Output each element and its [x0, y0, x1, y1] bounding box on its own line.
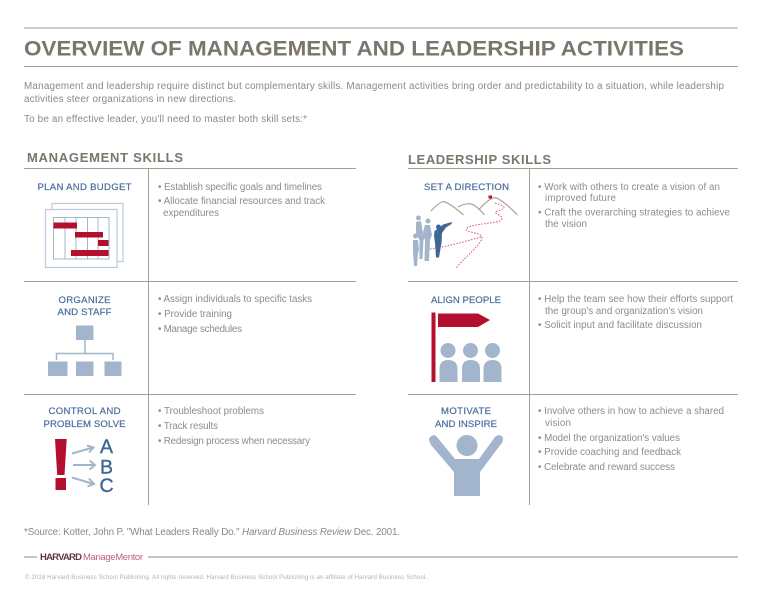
icon: exclamation mark with options [55, 436, 114, 497]
panel: control and problem solve [44, 406, 310, 497]
label: motivate and inspire: AND INSPIRE [435, 419, 497, 430]
bullets: control and problem solve: • Troubleshoot problems [158, 406, 264, 417]
bullets: set a direction: • Work with others to create a vision of an [538, 182, 720, 193]
label: organize and staff: ORGANIZE [58, 295, 110, 306]
icon: exclamation mark with options: C [99, 475, 114, 497]
logo: Harvard ManageMentor [40, 552, 143, 563]
label: plan and budget: PLAN AND BUDGET [38, 182, 132, 193]
bullets: plan and budget: expenditures [163, 208, 219, 219]
panel: plan and budget [38, 182, 325, 268]
label: motivate and inspire: MOTIVATE [441, 406, 491, 417]
panel: align people [431, 294, 733, 382]
bullets: align people: the group's and organization's vision [545, 306, 703, 317]
label: organize and staff [58, 295, 112, 318]
bullets: organize and staff: • Provide training [158, 309, 232, 320]
bullets: set a direction: improved future [545, 193, 617, 204]
bullets: plan and budget: • Allocate financial resources and track [158, 196, 325, 207]
label: control and problem solve: PROBLEM SOLVE [44, 419, 126, 430]
bullets: set a direction: • Craft the overarching strategies to achieve [538, 208, 731, 218]
bullets: organize and staff: • Assign individuals to specific tasks [158, 294, 312, 305]
label: organize and staff: AND STAFF [58, 307, 112, 318]
panel: set a direction [413, 182, 731, 268]
panel: motivate and inspire [429, 406, 724, 496]
intro text: activities steer organizations in new directions. [24, 94, 236, 105]
bullets: motivate and inspire [538, 406, 724, 473]
heading: management skills: MANAGEMENT SKILLS [27, 150, 183, 165]
logo: Harvard ManageMentor: ManageMentor [83, 552, 143, 563]
logo: Harvard ManageMentor: HARVARD [40, 552, 82, 563]
icon: leader pointing at mountains [413, 196, 518, 268]
bullets: set a direction: the vision [545, 219, 587, 230]
icon: gantt chart [46, 204, 123, 268]
bullets: motivate and inspire: • Provide coaching and feedback [538, 447, 681, 458]
bullets: motivate and inspire: • Involve others in how to achieve a shared [538, 406, 724, 417]
bullets: organize and staff: • Manage schedules [158, 324, 242, 335]
bullets: organize and staff [158, 294, 312, 335]
source note: *Source: Kotter, John P. "What Leaders Really Do." Harvard Business Review Dec. 2001. [24, 527, 400, 538]
title: OVERVIEW OF MANAGEMENT AND LEADERSHIP ACTIVITIES [24, 36, 684, 60]
label: control and problem solve [44, 406, 126, 430]
label: align people: ALIGN PEOPLE [431, 295, 501, 306]
label: set a direction: SET A DIRECTION [424, 182, 509, 193]
bullets: motivate and inspire: vision [545, 418, 571, 429]
icon: exclamation mark with options: A [100, 436, 113, 458]
label: motivate and inspire [435, 406, 497, 430]
copyright: © 2018 Harvard Business School Publishing. All rights reserved. Harvard Business School Publishing is an affiliate of Harvard Business School. [25, 574, 427, 581]
bullets: control and problem solve: • Redesign process when necessary [158, 436, 310, 447]
bullets: align people: • Solicit input and facilitate discussion [538, 320, 702, 331]
bullets: align people: • Help the team see how their efforts support [538, 294, 733, 305]
icon: person with raised arms [429, 435, 503, 496]
bullets: plan and budget [158, 182, 325, 219]
bullets: motivate and inspire: • Celebrate and reward success [538, 462, 675, 473]
bullets: align people [538, 294, 733, 331]
icon: org chart [48, 326, 122, 376]
icon: flag and three people [432, 312, 502, 382]
intro text: Management and leadership require distinct but complementary skills. Management activities bring order and predictability to a situation, while leadership [24, 81, 725, 92]
heading: leadership skills: LEADERSHIP SKILLS [408, 152, 551, 167]
bullets: control and problem solve [158, 406, 310, 447]
bullets: plan and budget: • Establish specific goals and timelines [158, 182, 322, 193]
panel: organize and staff [48, 294, 312, 376]
bullets: motivate and inspire: • Model the organization's values [538, 433, 680, 444]
bullets: set a direction [538, 182, 731, 230]
intro text: To be an effective leader, you'll need to master both skill sets:* [24, 114, 307, 125]
intro text [24, 81, 725, 125]
icon: exclamation mark with options: B [100, 456, 113, 478]
label: control and problem solve: CONTROL AND [48, 406, 121, 417]
bullets: control and problem solve: • Track results [158, 421, 218, 432]
